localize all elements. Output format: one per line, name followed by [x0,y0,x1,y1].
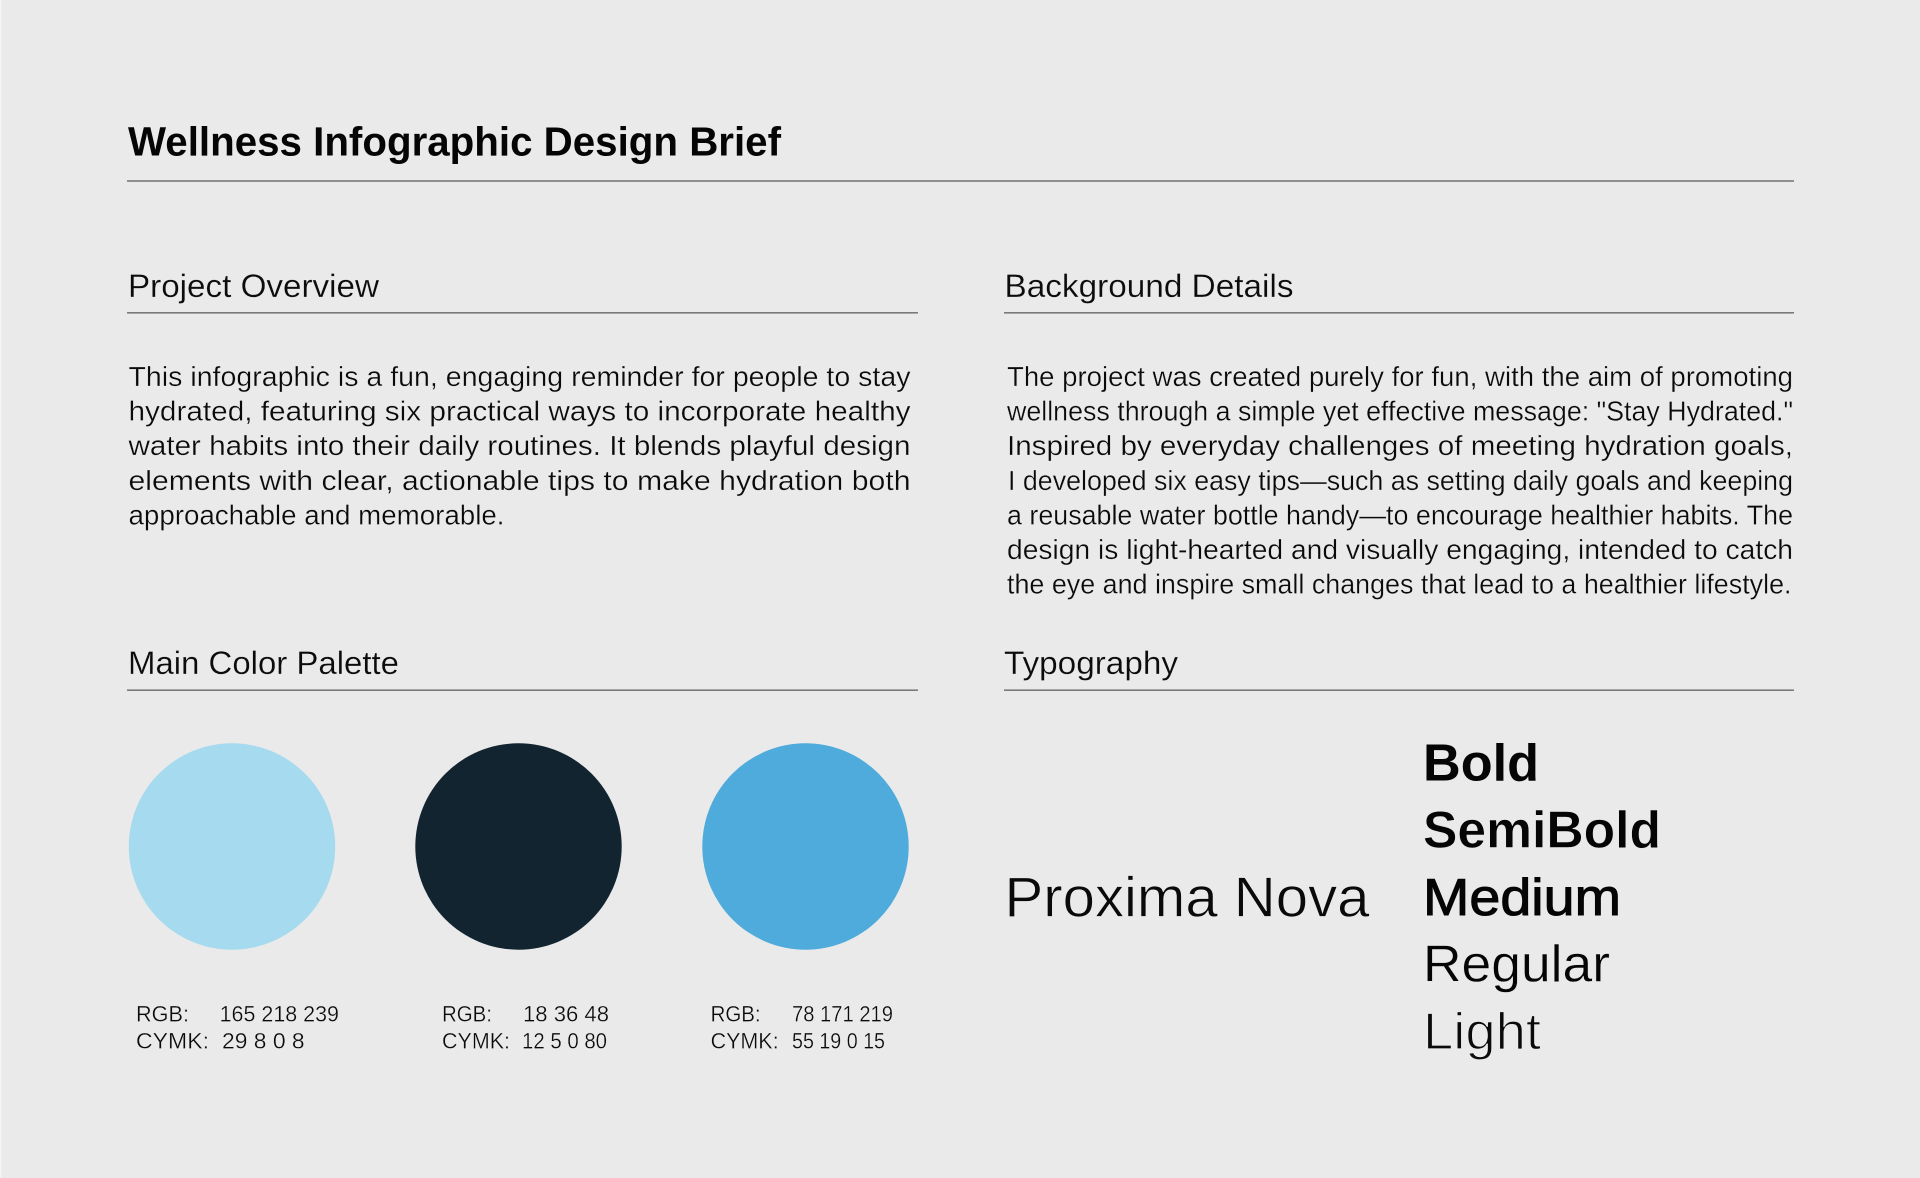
heading: main color palette: Main Color Palette [128,645,399,681]
font name: Proxima Nova [1004,866,1370,930]
font weights list: Light [1423,1003,1542,1061]
text block: background details body: Inspired by everyday challenges of meeting hydration goals, [1007,430,1793,461]
text block: project overview body: hydrated, featuring six practical ways to incorporate healthy [128,396,910,427]
text block: background details body [1006,361,1793,600]
text block: background details body: a reusable water bottle handy—to encourage healthier habits. The [1007,499,1793,530]
text block: project overview body: water habits into their daily routines. It blends playful design [127,430,911,461]
swatch: light blue: CYMK: [136,1028,209,1053]
panel: main color palette [127,645,918,1053]
panel: project overview [127,268,918,530]
text block: project overview body: approachable and memorable. [128,499,504,530]
swatch: dark navy: CYMK: [442,1028,510,1053]
swatch: medium blue: 55 19 0 15 [792,1028,885,1053]
swatch: medium blue [702,743,909,1053]
text block: background details body: The project was created purely for fun, with the aim of promoting [1007,361,1793,392]
font weights list: Regular [1423,936,1610,994]
swatch: light blue: 29 8 0 8 [222,1028,305,1053]
text block: project overview body [127,361,911,530]
swatch: light blue [129,743,339,1053]
font weights list: Medium [1423,869,1621,927]
swatch: dark navy: RGB: [442,1002,492,1027]
swatch: medium blue: RGB: [711,1002,761,1027]
swatch: dark navy [415,743,622,1053]
heading: background details: Background Details [1004,268,1294,304]
swatch: dark navy: 18 36 48 [523,1002,609,1027]
text block: background details body: wellness through a simple yet effective message: "Stay Hydrated." [1006,396,1793,427]
font weights list: SemiBold [1423,801,1661,859]
font weights list [1423,735,1661,1061]
text block: background details body: design is light-hearted and visually engaging, intended to catch [1007,534,1793,565]
text block: background details body: I developed six easy tips—such as setting daily goals and keeping [1008,465,1793,496]
swatch: dark navy: 12 5 0 80 [522,1028,607,1053]
font weights list: Bold [1423,735,1539,793]
swatch: light blue: 165 218 239 [220,1002,339,1027]
heading: project overview: Project Overview [128,268,380,304]
swatch: medium blue: 78 171 219 [792,1002,893,1027]
swatch: medium blue: CYMK: [711,1028,779,1053]
heading: typography: Typography [1004,645,1178,681]
text block: background details body: the eye and inspire small changes that lead to a healthier lifestyle. [1007,569,1792,600]
panel: background details [1004,268,1794,600]
swatch: light blue: RGB: [136,1002,189,1027]
text block: project overview body: elements with clear, actionable tips to make hydration both [128,465,911,496]
title: Wellness Infographic Design Brief [128,119,781,165]
panel: typography [1004,645,1794,1061]
text block: project overview body: This infographic is a fun, engaging reminder for people to stay [128,361,910,392]
